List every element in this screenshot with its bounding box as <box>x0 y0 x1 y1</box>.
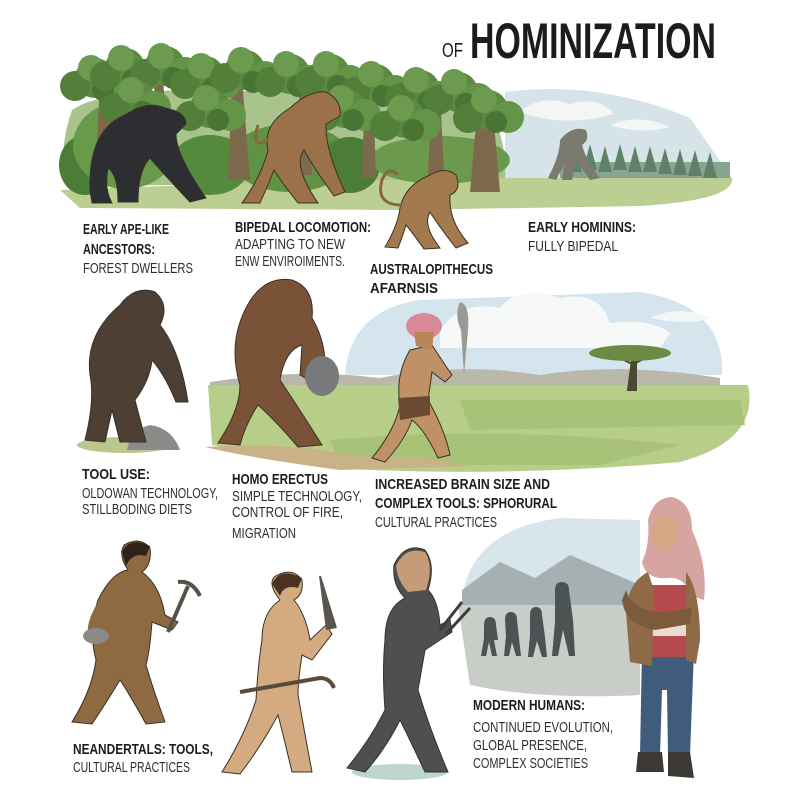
tree canopy <box>60 43 524 141</box>
text: neandertals: CULTURAL PRACTICES <box>73 760 190 776</box>
text: modern humans: CONTINUED EVOLUTION, <box>473 720 613 736</box>
text: tool use: OLDOWAN TECHNOLOGY, <box>82 486 218 502</box>
text: early ape-like ancestors: EARLY APE-LIKE <box>83 221 169 238</box>
ape: Homo erectus <box>218 279 325 447</box>
text: homo erectus: CONTROL OF FIRE, <box>232 505 343 521</box>
jacket right panel <box>686 572 700 664</box>
jacket left panel <box>626 572 654 666</box>
text: early hominins: EARLY HOMININS: <box>528 219 636 236</box>
cloud wisp <box>650 311 710 322</box>
sky <box>345 292 722 375</box>
text: bipedal locomotion <box>235 219 371 270</box>
hair <box>272 573 302 596</box>
scarf drape <box>642 497 705 600</box>
pick tool <box>168 582 200 632</box>
mountains <box>462 555 640 610</box>
text: homo erectus: SIMPLE TECHNOLOGY, <box>232 489 362 505</box>
title <box>442 13 716 69</box>
lower tool <box>240 678 334 692</box>
text: australopithecus: AUSTRALOPITHECUS <box>370 261 493 278</box>
text: bipedal locomotion: BIPEDAL LOCOMOTION: <box>235 219 371 236</box>
text: increased brain size <box>375 476 557 531</box>
face <box>652 515 678 551</box>
sweater <box>650 585 690 657</box>
sweater pattern <box>650 618 690 636</box>
rock <box>127 425 180 450</box>
text: homo erectus: MIGRATION <box>232 526 296 542</box>
text: modern humans: COMPLEX SOCIETIES <box>473 756 588 772</box>
hair <box>122 542 150 566</box>
ape: dark early ape <box>90 105 206 203</box>
fur loincloth <box>398 396 430 420</box>
ape: tool user <box>85 290 188 442</box>
scene: modern humans backdrop <box>458 518 640 696</box>
grass shading <box>330 400 745 465</box>
distant hills <box>210 369 720 390</box>
scene: savanna <box>77 279 750 472</box>
person with brain <box>372 302 468 462</box>
grass field <box>208 385 750 472</box>
sky <box>462 518 640 600</box>
distant pines <box>560 144 730 180</box>
figure: modern grey-suited human <box>347 548 470 780</box>
tree trunks <box>96 75 500 192</box>
figure: modern woman <box>622 497 705 778</box>
figure: Neandertal <box>72 541 200 724</box>
text: australopithecus: AFARNSIS <box>370 280 438 297</box>
pliers tool <box>440 602 470 634</box>
clouds <box>520 100 670 131</box>
clouds <box>440 292 670 348</box>
text: homo erectus <box>232 471 362 542</box>
text: early ape-like ancestors <box>83 221 193 277</box>
text: tool use: STILLBODING DIETS <box>82 502 192 518</box>
text: modern humans <box>473 697 613 772</box>
ground path <box>205 446 470 470</box>
text: early hominins: FULLY BIPEDAL <box>528 239 618 255</box>
meadow <box>60 178 732 210</box>
text: modern humans: MODERN HUMANS: <box>473 697 585 714</box>
text: neandertals: NEANDERTALS: TOOLS, <box>73 741 213 758</box>
scene: forest to grassland <box>59 43 732 249</box>
axe in hand <box>320 576 336 630</box>
text: increased brain size: INCREASED BRAIN SIZE AND <box>375 476 550 493</box>
rock held <box>305 356 339 396</box>
figure: Homo erectus walking <box>222 572 336 774</box>
text: tool use: TOOL USE: <box>82 466 150 483</box>
ape: brown bipedal <box>242 92 345 203</box>
text: increased brain size: COMPLEX TOOLS: SPHORURAL <box>375 495 557 512</box>
title: OF <box>442 40 463 62</box>
face <box>396 551 430 592</box>
folded arms <box>622 590 692 630</box>
stone <box>83 628 109 644</box>
tail of Australopithecus <box>381 171 402 205</box>
jeans <box>640 650 694 755</box>
ape: Australopithecus <box>385 170 468 249</box>
text: early ape-like ancestors: ANCESTORS: <box>83 241 155 258</box>
tail of brown ape <box>256 125 268 143</box>
acacia tree <box>589 345 671 390</box>
text: modern humans: GLOBAL PRESENCE, <box>473 738 587 754</box>
brain head <box>406 313 442 339</box>
forest backing <box>63 90 505 186</box>
distant sky <box>505 89 732 180</box>
ape: distant grey hominin <box>548 129 600 180</box>
stone tool <box>457 302 468 375</box>
forest floor bushes <box>59 101 510 195</box>
text: bipedal locomotion: ENW ENVIROIMENTS. <box>235 254 345 270</box>
text: homo erectus: HOMO ERECTUS <box>232 471 328 488</box>
text: increased brain size: CULTURAL PRACTICES <box>375 515 497 531</box>
text: neandertals <box>73 741 213 776</box>
text: australopithecus <box>370 261 493 297</box>
text: early ape-like ancestors: FOREST DWELLERS <box>83 261 193 277</box>
text: bipedal locomotion: ADAPTING TO NEW <box>235 237 345 253</box>
arm with stone <box>88 600 110 640</box>
text: tool use <box>82 466 218 518</box>
small group of figures <box>481 582 575 657</box>
ground under left ape <box>77 437 173 453</box>
shoes <box>636 752 694 778</box>
text: early hominins <box>528 219 636 255</box>
grey ground <box>458 605 640 696</box>
